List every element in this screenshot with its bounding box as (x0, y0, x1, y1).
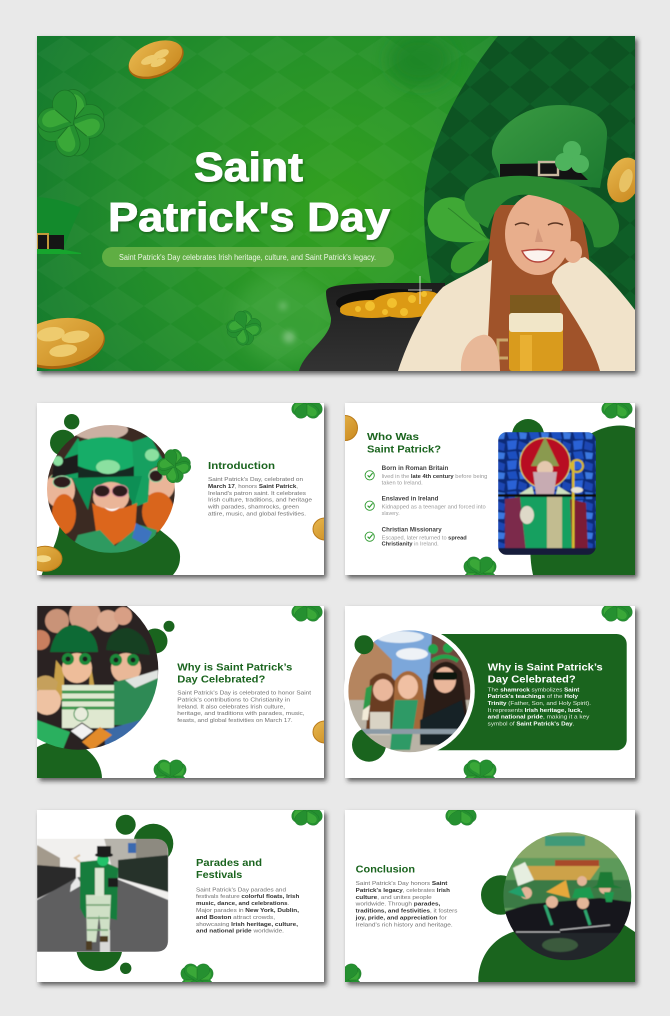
text block: Patrick's contributions to Christianity in (177, 697, 290, 703)
text block: The shamrock symbolizes Saint (488, 687, 580, 693)
green blob (42, 522, 180, 575)
text block: attire, music, and global festivities. (208, 512, 306, 518)
heading: Saint Patrick? (367, 444, 441, 456)
text block (355, 881, 458, 928)
icon: top shamrock (446, 795, 476, 825)
text block (196, 887, 300, 935)
photo: children with green glasses (30, 600, 162, 755)
icon: coin right (312, 518, 324, 540)
text block: Ireland's patron saint. It celebrates (208, 491, 306, 497)
text block: Saint Patrick's Day parades and (196, 887, 286, 893)
icon: corner shamrock (291, 403, 322, 418)
text block: Ireland. It also celebrates Irish culture, (177, 704, 285, 710)
icon: pot of gold (299, 276, 448, 371)
icon: bottom shamrock (464, 557, 496, 589)
title (108, 144, 390, 240)
beer mug (498, 313, 563, 371)
icon: bottom shamrock (154, 760, 186, 792)
icon: bottom shamrock (464, 760, 496, 792)
subtitle pill: Saint Patrick's Day celebrates Irish heritage, culture, and Saint Patrick's legacy. (119, 253, 376, 262)
sweater (398, 260, 492, 371)
panel: introduction slide (28, 388, 337, 575)
text block: and national pride worldwide. (196, 929, 284, 935)
right wearer (148, 466, 175, 498)
icon: coin right (313, 721, 337, 743)
hand on cheek (564, 241, 582, 263)
list item: christian missionary: Christianity in Ireland. (382, 542, 439, 548)
list item: born in roman britain: Born in Roman Britain (382, 466, 449, 472)
text block: traditions, and festivities , it fosters (356, 909, 458, 915)
panel: conclusion slide (329, 795, 635, 996)
torso (510, 295, 560, 371)
text block: with parades, shamrocks, green (208, 505, 299, 511)
icon: bottom shamrock (181, 964, 213, 996)
subtitle pill (102, 247, 394, 267)
text block: heritage, and traditions with parades, music, (177, 711, 305, 717)
list item: christian missionary (365, 527, 467, 548)
icon: corner shamrock (292, 591, 322, 621)
text block: showcasing Irish heritage, culture, (196, 922, 299, 928)
hat crown (492, 105, 607, 188)
text block: music, dance, and celebrations . (196, 901, 289, 907)
panel: who was saint patrick slide (344, 402, 641, 582)
text block: and national pride , making it a key (488, 715, 590, 721)
list item: christian missionary: Christian Missionary (382, 527, 442, 533)
icon: corner shamrock (602, 591, 632, 621)
text block: Irish culture, traditions, and heritage (208, 498, 312, 504)
icon: bottom left coin (37, 318, 105, 369)
text block: Patrick's teachings of the Holy (488, 694, 578, 700)
text block: Patrick's legacy , celebrates Irish (356, 888, 450, 894)
text block: March 17 , honors Saint Patrick , (208, 484, 298, 490)
face (505, 193, 571, 275)
heading: Conclusion (356, 863, 415, 875)
icon: top coin (128, 40, 184, 79)
list item: enslaved in ireland: slavery. (382, 511, 400, 517)
icon: shamrock on photo (157, 448, 192, 484)
photo: parade (37, 838, 169, 953)
dark curved background (424, 36, 635, 310)
heading: Why is Saint Patrick’s (177, 661, 292, 673)
text block (488, 687, 591, 728)
photo: three women (348, 630, 471, 753)
green circles (76, 815, 173, 974)
heading: Introduction (208, 460, 275, 472)
icon: check (365, 532, 374, 541)
illustration: woman with hat and beer (398, 105, 635, 371)
heading (196, 857, 262, 881)
text block: and Boston attract crowds, (196, 915, 275, 921)
heading (367, 431, 441, 456)
icon: left hat (37, 197, 81, 254)
heading (488, 661, 603, 685)
heading: Parades and (196, 857, 262, 869)
icon: coin bottom left (37, 546, 62, 572)
text block (177, 691, 312, 724)
text block (208, 477, 312, 518)
text block: Saint Patrick's Day is celebrated to honor Saint (177, 691, 312, 697)
white ring (344, 626, 475, 757)
green circle top (354, 635, 374, 654)
photo: bearded hats (45, 420, 175, 553)
center wearer (78, 437, 134, 476)
text block: Trinity (Father, Son, and Holy Spirit). (488, 701, 591, 707)
list item: born in roman britain (365, 466, 488, 486)
icon: corner shamrock (292, 795, 322, 825)
hat shamrock (555, 141, 589, 173)
hat band (500, 163, 588, 180)
heading (177, 661, 292, 685)
hair (480, 205, 600, 371)
title: Patrick's Day (108, 194, 390, 240)
heading: Who Was (367, 431, 419, 443)
text block: It represents Irish heritage, luck, (488, 708, 583, 714)
text block: Saint Patrick's Day, celebrated on (208, 477, 303, 483)
blurred shamrock top (388, 40, 448, 87)
icon: right coin (607, 158, 635, 202)
list item: born in roman britain: taken to Ireland. (382, 480, 423, 486)
text block: Ireland's rich history and heritage. (356, 922, 453, 928)
green shapes (18, 621, 174, 817)
heading: Day Celebrated? (177, 673, 265, 685)
list item: enslaved in ireland: Kidnapped as a teenager and forced into (382, 505, 486, 511)
panel: why celebrated slide (18, 591, 337, 817)
list item: christian missionary: Escaped, later returned to spread (382, 535, 467, 541)
text block: joy, pride, and appreciation for (355, 915, 447, 921)
list item: born in roman britain: lived in the late 4th century before being (382, 474, 488, 480)
photo: stained glass (498, 432, 596, 555)
list item: enslaved in ireland (365, 497, 486, 517)
icon: check (365, 471, 374, 480)
green circles (352, 728, 386, 762)
heading: Festivals (196, 869, 242, 881)
icon: small shamrock (226, 310, 262, 346)
text block: Major parades in New York, Dublin, (196, 908, 300, 914)
list item: enslaved in ireland: Enslaved in Ireland (382, 497, 439, 503)
text block: worldwide. Through parades, (356, 902, 441, 908)
panel: shamrock meaning slide (344, 591, 635, 792)
panel: parades and festivals slide (37, 795, 324, 996)
icon: left shamrock (37, 89, 105, 157)
text block: Saint Patrick's Day honors Saint (356, 881, 448, 887)
green circles (50, 414, 79, 456)
heading: Why is Saint Patrick’s (488, 661, 603, 673)
photo: crowd in green hats (503, 832, 632, 961)
text block: festivals feature colorful floats, Irish (196, 894, 299, 900)
green shapes (512, 419, 635, 575)
left wearer (47, 474, 76, 506)
title: Saint (194, 144, 303, 190)
hand on mug (461, 335, 500, 371)
panel: hero slide (12, 33, 646, 375)
green shapes (478, 875, 635, 982)
icon: coin left (345, 415, 358, 441)
raised sleeve (552, 257, 635, 371)
text block: feasts, and global festivities on March 17. (177, 718, 293, 724)
icon: bottom left shamrock (329, 964, 361, 996)
hat brim (464, 176, 619, 248)
heading: Day Celebrated? (488, 673, 576, 685)
icon: check (365, 501, 374, 510)
text block: culture , and unites people (356, 895, 432, 901)
icon: corner shamrock (601, 403, 632, 418)
green text panel (420, 634, 627, 750)
icon: big shamrock behind woman (428, 197, 490, 273)
text block: symbol of Saint Patrick's Day . (488, 722, 574, 728)
sparkle glow (240, 274, 331, 363)
